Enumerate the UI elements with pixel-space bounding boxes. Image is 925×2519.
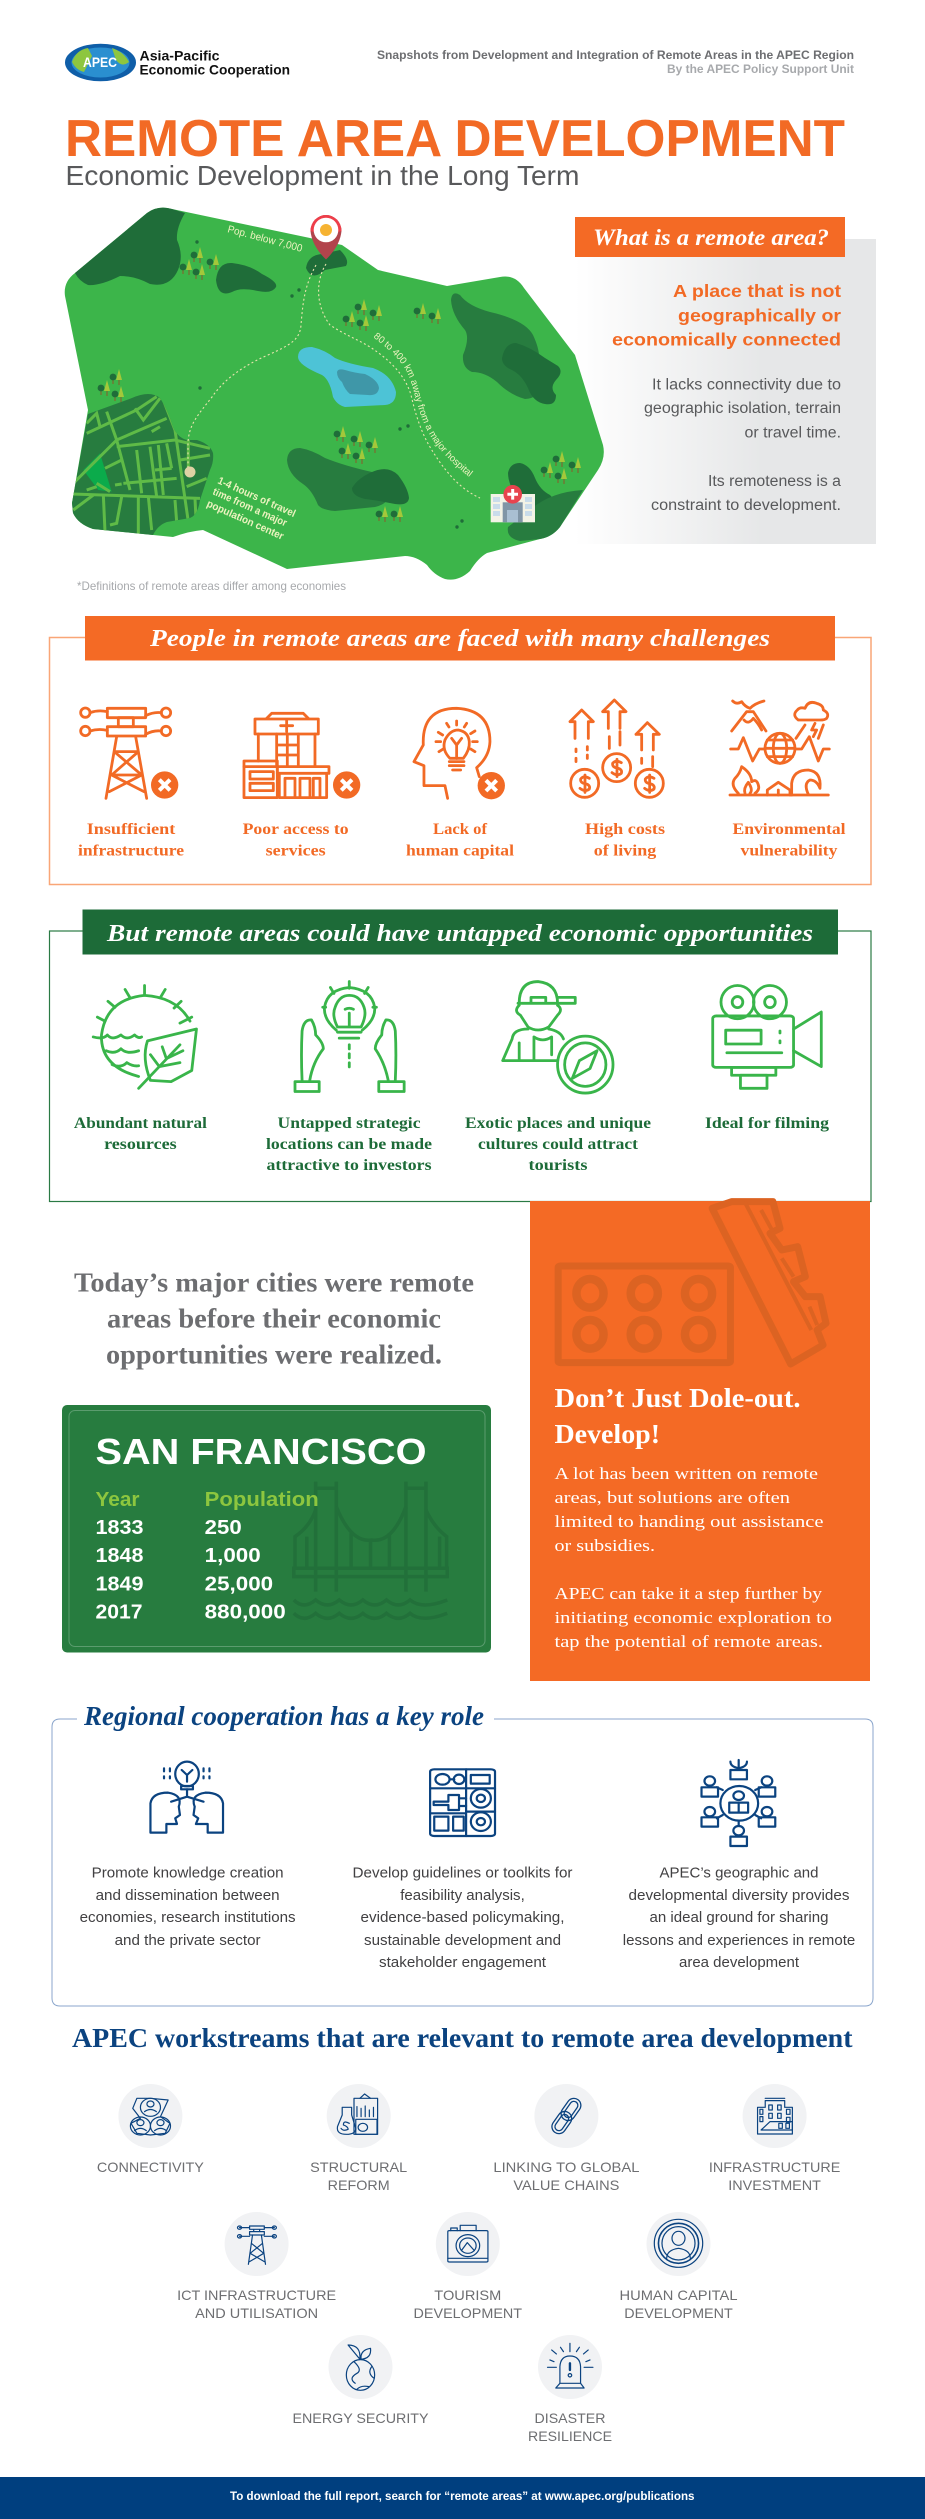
footer bar: [0, 2477, 925, 2519]
map label: hospital distance path: [373, 337, 490, 492]
heading: Regional cooperation has a key role: [83, 1701, 484, 1731]
icon: people network: [702, 1760, 775, 1846]
column text: guidelines: [352, 1866, 573, 1971]
column text: guidelines: evidence-based policymaking,: [360, 1910, 564, 1926]
workstream labels: ICT INFRASTRUCTURE: [177, 2287, 336, 2303]
challenge labels: [78, 821, 846, 860]
population table: 25,000: [205, 1572, 273, 1596]
workstream: ICT infrastructure: [225, 2212, 289, 2276]
population table: 880,000: [205, 1600, 286, 1624]
workstream: human capital: [646, 2212, 710, 2276]
population table: 250: [205, 1516, 242, 1539]
opportunity labels: locations can be made: [266, 1136, 432, 1153]
opportunity labels: [74, 1115, 829, 1174]
population table: Year: [96, 1488, 140, 1511]
opportunity labels: Ideal for filming: [705, 1115, 829, 1132]
trees: [98, 240, 581, 529]
workstream: connectivity: [118, 2084, 182, 2148]
banner: [82, 910, 838, 954]
banner: But remote areas could have untapped economic opportunities: [106, 921, 813, 947]
definition: economically connected: [612, 330, 841, 350]
opportunity labels: cultures could attract: [478, 1136, 639, 1153]
panel body: initiating economic exploration to: [554, 1608, 832, 1627]
panel body: APEC can take it a step further by: [554, 1584, 823, 1603]
icon: film camera: [713, 986, 821, 1088]
title: REMOTE AREA DEVELOPMENT: [65, 110, 845, 168]
population table: 1848: [96, 1544, 144, 1567]
explanation: [644, 376, 841, 514]
workstream: tourism: [436, 2212, 500, 2276]
footer bar: To download the full report, search for “remote areas” at www.apec.org/publications: [230, 2491, 694, 2503]
icon: high costs: [570, 700, 663, 797]
workstream: disaster resilience: [538, 2335, 602, 2399]
explanation: constraint to development.: [651, 497, 841, 514]
workstream labels: TOURISM: [434, 2287, 501, 2303]
map label: travel time: [205, 475, 297, 542]
opportunity labels: resources: [104, 1136, 177, 1153]
workstream: structural reform: [327, 2084, 391, 2148]
population table: [96, 1488, 319, 1624]
icon: natural resources: [93, 986, 196, 1088]
map land: [65, 208, 604, 580]
heading: workstreams: APEC workstreams that are relevant to remote area development: [72, 2023, 853, 2053]
icon: golden gate bridge: [294, 1482, 447, 1618]
statement: major cities: opportunities were realized.: [106, 1340, 442, 1370]
icon: knowledge: [150, 1762, 223, 1833]
panel body: or subsidies.: [554, 1536, 655, 1555]
map label: travel time: 1-4 hours of travel: [216, 475, 297, 520]
workstream: infrastructure investment: [743, 2084, 807, 2148]
workstream labels: LINKING TO GLOBAL: [493, 2159, 640, 2175]
icon: toolkit: [430, 1769, 495, 1836]
column text: diversity: APEC’s geographic and: [660, 1866, 818, 1882]
forests: [75, 208, 583, 541]
workstream labels: RESILIENCE: [528, 2428, 612, 2444]
banner: [85, 616, 835, 660]
challenge labels: Lack of: [433, 821, 488, 838]
population table: 1833: [96, 1516, 144, 1539]
population table: 2017: [96, 1600, 142, 1624]
opportunity labels: attractive to investors: [266, 1157, 432, 1174]
column text: knowledge: economies, research institutions: [80, 1910, 296, 1926]
workstream labels: STRUCTURAL: [310, 2159, 407, 2175]
challenge labels: Insufficient: [87, 821, 176, 838]
panel: opportunities: [50, 910, 871, 1202]
logo: APEC: Economic Cooperation: [140, 62, 290, 78]
panel: don't just dole-out: [530, 1201, 870, 1681]
column text: guidelines: sustainable development and: [364, 1933, 561, 1949]
column text: knowledge: Promote knowledge creation: [92, 1866, 284, 1882]
workstream labels: DEVELOPMENT: [414, 2305, 522, 2321]
opportunity labels: Exotic places and unique: [465, 1115, 651, 1132]
workstream: global value chains: [534, 2084, 598, 2148]
icon: location pin: [310, 215, 342, 260]
panel: San Francisco card: [62, 1405, 491, 1652]
challenge labels: infrastructure: [78, 842, 184, 860]
panel body: A lot has been written on remote: [554, 1464, 818, 1483]
population table: 1,000: [205, 1544, 261, 1567]
map label: hospital distance: 80 to 400 km away from a major hospital: [374, 332, 474, 477]
heading banner: What is a remote area?: [593, 225, 829, 250]
definition: A place that is not: [673, 281, 841, 301]
column text: guidelines: Develop guidelines or toolkits for: [352, 1866, 573, 1882]
panel: challenges: [50, 616, 871, 884]
panel: what is a remote area: [575, 217, 876, 544]
workstream: energy security: [328, 2335, 392, 2399]
column text: guidelines: stakeholder engagement: [379, 1955, 546, 1971]
challenge labels: services: [266, 842, 326, 860]
explanation: geographic isolation, terrain: [644, 400, 841, 417]
icon: strategic locations: [295, 982, 404, 1091]
challenge labels: of living: [594, 842, 656, 860]
column text: guidelines: feasibility analysis,: [400, 1888, 525, 1904]
source line: Snapshots from Development and Integration of Remote Areas in the APEC Region: [377, 50, 854, 62]
column text: knowledge: [80, 1866, 296, 1949]
footnote: *Definitions of remote areas differ among economies: [77, 579, 346, 593]
logo: APEC: [65, 44, 290, 81]
panel body: limited to handing out assistance: [554, 1512, 824, 1531]
workstream labels: DEVELOPMENT: [624, 2305, 733, 2321]
column text: diversity: [623, 1866, 855, 1971]
panel body: [554, 1464, 832, 1651]
lake: [298, 347, 396, 407]
icon: hospital: [491, 485, 535, 522]
workstream labels: VALUE CHAINS: [513, 2177, 619, 2193]
statement: major cities: Today’s major cities were remote: [74, 1268, 474, 1298]
source line: By the APEC Policy Support Unit: [667, 64, 854, 76]
workstream labels: INFRASTRUCTURE: [709, 2159, 840, 2175]
map: remote area: [64, 208, 604, 580]
workstream labels: DISASTER: [534, 2410, 606, 2426]
challenge labels: vulnerability: [740, 842, 838, 860]
panel heading: Develop!: [554, 1419, 660, 1449]
heading banner: [575, 217, 845, 257]
explanation: or travel time.: [744, 424, 841, 442]
icon: ghost bricks: [558, 1202, 826, 1364]
challenge labels: Environmental: [732, 821, 846, 838]
card heading: SAN FRANCISCO: [96, 1431, 426, 1472]
source line: [377, 50, 854, 76]
definition: [612, 281, 841, 350]
logo: APEC: APEC: [83, 54, 117, 70]
explanation: It lacks connectivity due to: [652, 376, 841, 394]
column text: diversity: area development: [679, 1955, 799, 1971]
city: [72, 394, 214, 535]
icon: pylon: [81, 708, 178, 799]
challenge labels: human capital: [406, 842, 515, 860]
population table: Population: [205, 1488, 319, 1511]
challenge labels: High costs: [585, 821, 665, 838]
panel: regional cooperation: [52, 1701, 873, 2006]
column text: diversity: developmental diversity provides: [628, 1888, 850, 1904]
statement: major cities: areas before their economic: [107, 1304, 441, 1334]
workstream labels: ENERGY SECURITY: [292, 2410, 429, 2426]
population table: 1849: [96, 1572, 144, 1596]
map label: travel time: time from a major: [211, 486, 289, 529]
opportunity labels: Abundant natural: [74, 1115, 207, 1132]
panel body: areas, but solutions are often: [554, 1488, 791, 1507]
town marker: [184, 466, 196, 478]
column text: diversity: an ideal ground for sharing: [650, 1910, 828, 1926]
panel body: tap the potential of remote areas.: [554, 1632, 823, 1651]
map label: travel time: population center: [205, 498, 285, 542]
workstream labels: HUMAN CAPITAL: [620, 2287, 738, 2303]
icon: poor services building: [244, 713, 360, 799]
column text: knowledge: and dissemination between: [96, 1888, 280, 1904]
panel heading: Don’t Just Dole-out.: [554, 1383, 800, 1413]
logo: APEC: Asia-Pacific: [140, 49, 220, 64]
challenge labels: Poor access to: [243, 821, 349, 838]
workstream labels: REFORM: [328, 2177, 390, 2193]
panel heading: [554, 1383, 800, 1449]
workstream labels: [97, 2159, 840, 2444]
statement: major cities: [74, 1268, 474, 1370]
icon: lack of human capital: [414, 708, 505, 799]
roads dashed: [188, 264, 480, 498]
map label: population: Pop. below 7,000: [226, 223, 304, 255]
icon: environmental vulnerability: [730, 701, 829, 795]
opportunity labels: Untapped strategic: [278, 1115, 420, 1132]
icon: tourist and compass: [503, 982, 613, 1093]
workstream labels: CONNECTIVITY: [97, 2159, 205, 2175]
workstream labels: INVESTMENT: [728, 2177, 821, 2193]
banner: People in remote areas are faced with many challenges: [149, 626, 770, 652]
explanation: Its remoteness is a: [708, 473, 841, 490]
workstream labels: AND UTILISATION: [195, 2305, 318, 2321]
column text: diversity: lessons and experiences in remote: [623, 1933, 855, 1949]
column text: knowledge: and the private sector: [115, 1933, 261, 1949]
opportunity labels: tourists: [528, 1157, 588, 1174]
subtitle: Economic Development in the Long Term: [66, 160, 580, 191]
definition: geographically or: [678, 306, 841, 326]
